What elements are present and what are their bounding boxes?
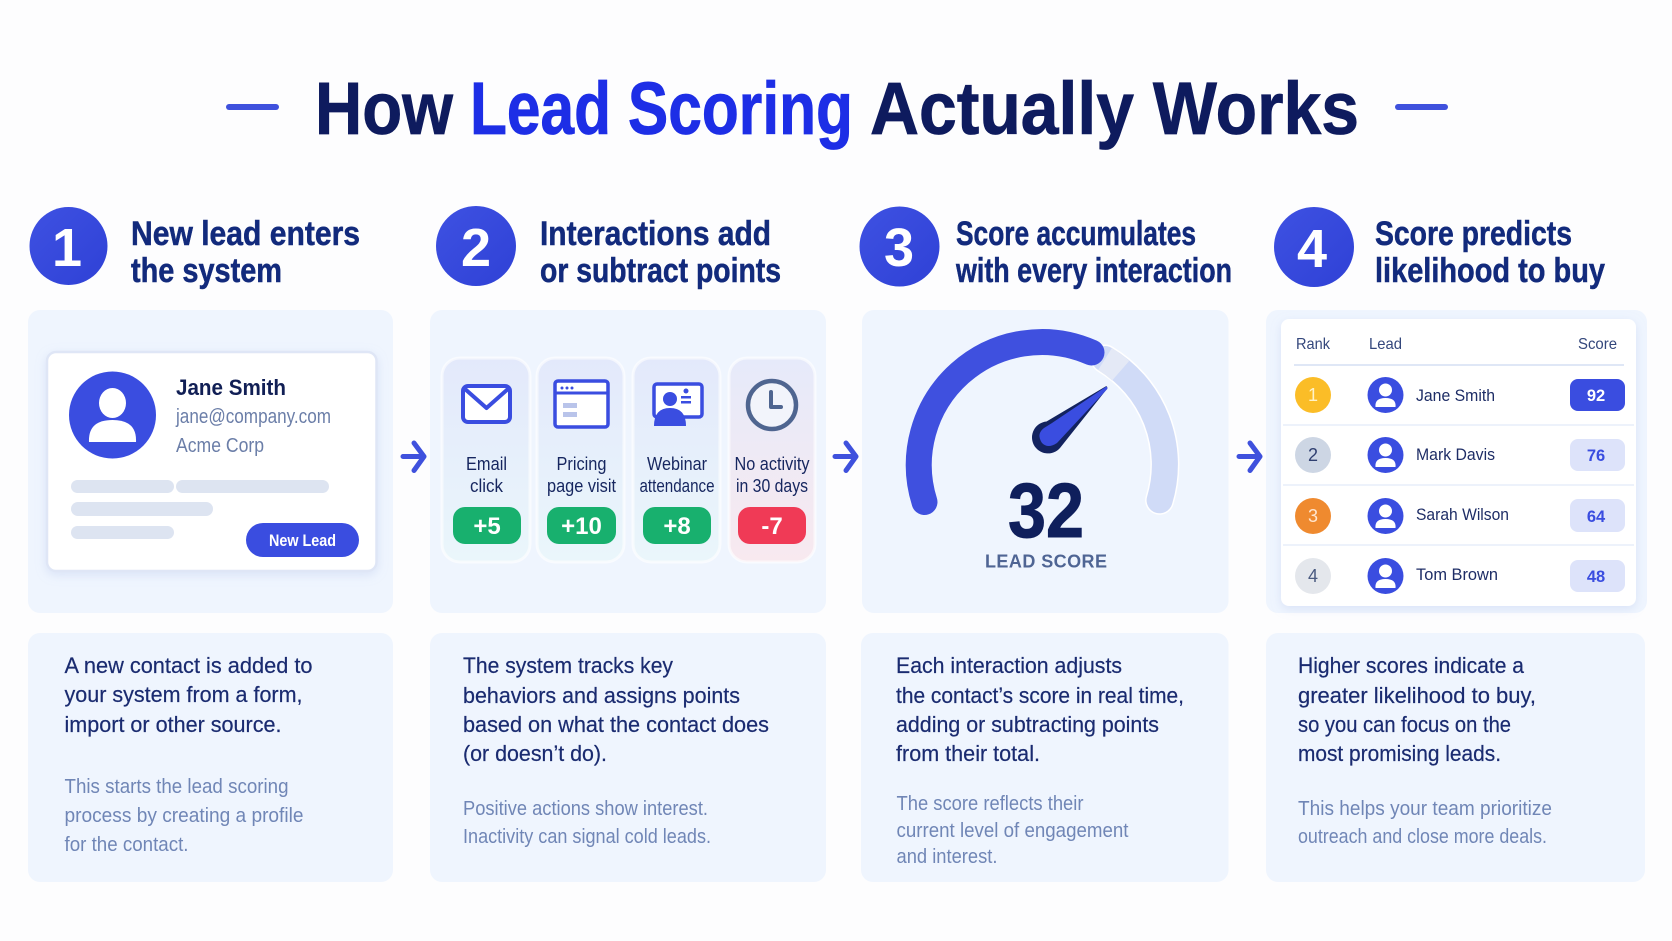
- description panel 3: adding or subtracting points: [896, 712, 1159, 737]
- description panel 4: outreach and close more deals.: [1298, 826, 1547, 848]
- row: Tom Brown: 4: [1308, 566, 1318, 586]
- contact details: Acme Corp: [176, 435, 264, 457]
- title: Lead Scoring: [470, 67, 853, 150]
- interaction: pricing page visit: [537, 358, 624, 562]
- step 4 heading: Score predicts: [1375, 215, 1572, 253]
- contact details: [175, 375, 331, 457]
- panel: score gauge: [862, 310, 1228, 613]
- icon: webinar: [654, 384, 702, 426]
- badge -7: [738, 507, 806, 544]
- row: Mark Davis: Mark Davis: [1416, 445, 1495, 464]
- badge +10: +10: [561, 513, 602, 540]
- description panel 3: current level of engagement: [896, 820, 1129, 842]
- table header: Rank: [1296, 336, 1331, 353]
- badge +5: [453, 507, 521, 544]
- badge +5: +5: [473, 513, 501, 540]
- step 2 heading: [436, 206, 781, 290]
- step 1 heading: [30, 207, 360, 290]
- badge -7: -7: [761, 513, 783, 540]
- row: Mark Davis: 2: [1308, 445, 1318, 465]
- description panel 4: Higher scores indicate a: [1298, 653, 1524, 678]
- interaction: no activity: [729, 358, 815, 562]
- interaction: webinar attendance: attendance: [640, 476, 714, 496]
- step 4 heading: 4: [1297, 219, 1327, 279]
- description panel 1: import or other source.: [64, 712, 282, 737]
- description panel 2: behaviors and assigns points: [463, 683, 740, 708]
- badge +8: +8: [663, 513, 691, 540]
- description panel 3: The score reflects their: [896, 793, 1084, 815]
- row: Tom Brown: Tom Brown: [1416, 565, 1498, 584]
- row: Mark Davis: [1295, 437, 1625, 473]
- row: Sarah Wilson: 64: [1587, 508, 1606, 526]
- row: Jane Smith: 92: [1587, 387, 1605, 405]
- description panel 2: based on what the contact does: [463, 712, 769, 737]
- description panel 4: greater likelihood to buy,: [1298, 683, 1536, 708]
- panel: ranked leads: [1266, 310, 1647, 613]
- title: [226, 67, 1448, 150]
- contact details: jane@company.com: [175, 406, 331, 428]
- description panel 3: [861, 633, 1228, 882]
- description panel 1: your system from a form,: [64, 682, 302, 707]
- row: Tom Brown: 48: [1587, 568, 1605, 586]
- description panel 2: Inactivity can signal cold leads.: [463, 826, 711, 848]
- description panel 1: for the contact.: [64, 834, 188, 856]
- row: Jane Smith: [1295, 377, 1625, 413]
- panel: new lead card: [28, 310, 393, 613]
- description panel 2: [430, 633, 826, 882]
- score value: 32: [1008, 468, 1084, 554]
- description panel 3: the contact’s score in real time,: [896, 683, 1184, 708]
- description panel 4: This helps your team prioritize: [1298, 798, 1552, 820]
- description panel 3: from their total.: [896, 741, 1040, 766]
- leads table: [1281, 319, 1636, 606]
- title: Actually Works: [870, 67, 1359, 150]
- icon: clock: [748, 381, 796, 429]
- description panel 2: The system tracks key: [463, 653, 674, 678]
- row: Sarah Wilson: [1295, 498, 1625, 534]
- panel: interactions: [430, 310, 826, 613]
- interaction: no activity: No activity: [734, 454, 810, 474]
- icon: browser window: [555, 381, 608, 427]
- row: Jane Smith: 1: [1308, 385, 1318, 405]
- step 3 heading: with every interaction: [955, 252, 1232, 290]
- step 2 heading: or subtract points: [540, 252, 781, 290]
- row: Sarah Wilson: Sarah Wilson: [1416, 505, 1509, 524]
- contact card: [47, 352, 376, 571]
- step 1 heading: New lead enters: [131, 215, 360, 253]
- contact details: Jane Smith: [176, 375, 286, 400]
- icon: email: [463, 386, 510, 422]
- score label: LEAD SCORE: [985, 552, 1107, 572]
- interaction: pricing page visit: Pricing: [556, 454, 606, 474]
- description panel 4: most promising leads.: [1298, 741, 1501, 766]
- step 1 heading: 1: [52, 218, 82, 278]
- description panel 3: Each interaction adjusts: [896, 653, 1122, 678]
- step 2 heading: Interactions add: [540, 215, 771, 253]
- description panel 4: so you can focus on the: [1298, 712, 1511, 737]
- interaction: email click: Email: [466, 454, 507, 474]
- table header: [1296, 336, 1617, 353]
- description panel 1: process by creating a profile: [64, 805, 304, 827]
- step 4 heading: [1274, 207, 1605, 290]
- new lead button: New Lead: [269, 532, 336, 550]
- table header: Score: [1578, 336, 1617, 353]
- gauge needle: [1032, 386, 1107, 453]
- row: Mark Davis: 76: [1587, 447, 1605, 465]
- description panel 4: [1266, 633, 1645, 882]
- placeholder lines: [71, 480, 329, 539]
- step 3 heading: [860, 206, 1232, 290]
- icon: contact avatar: [69, 372, 156, 458]
- interaction: webinar attendance: [633, 358, 720, 562]
- badge +10: [547, 507, 616, 544]
- interaction: pricing page visit: page visit: [547, 476, 616, 496]
- title: How: [315, 67, 453, 150]
- arrow 2: [835, 443, 856, 470]
- new lead button: [246, 523, 359, 557]
- step 2 heading: 2: [461, 218, 491, 278]
- table header: Lead: [1369, 336, 1402, 353]
- interaction: email click: click: [470, 476, 504, 496]
- description panel 1: This starts the lead scoring: [64, 776, 288, 798]
- badge +8: [643, 507, 711, 544]
- description panel 2: Positive actions show interest.: [463, 798, 708, 820]
- step 4 heading: likelihood to buy: [1375, 252, 1605, 290]
- description panel 1: [28, 633, 393, 882]
- description panel 1: A new contact is added to: [64, 653, 312, 678]
- interaction: email click: [442, 358, 530, 562]
- arrow 1: [403, 443, 424, 470]
- step 1 heading: the system: [131, 252, 282, 290]
- gauge: [919, 342, 1165, 502]
- step 3 heading: Score accumulates: [956, 215, 1196, 253]
- row: Tom Brown: [1295, 558, 1625, 594]
- row: Jane Smith: Jane Smith: [1416, 386, 1495, 405]
- description panel 3: and interest.: [896, 846, 998, 868]
- interaction: webinar attendance: Webinar: [647, 454, 707, 474]
- step 3 heading: 3: [884, 218, 914, 278]
- interaction: no activity: in 30 days: [736, 476, 808, 496]
- arrow 3: [1239, 443, 1260, 470]
- row: Sarah Wilson: 3: [1308, 506, 1318, 526]
- description panel 2: (or doesn’t do).: [463, 741, 607, 766]
